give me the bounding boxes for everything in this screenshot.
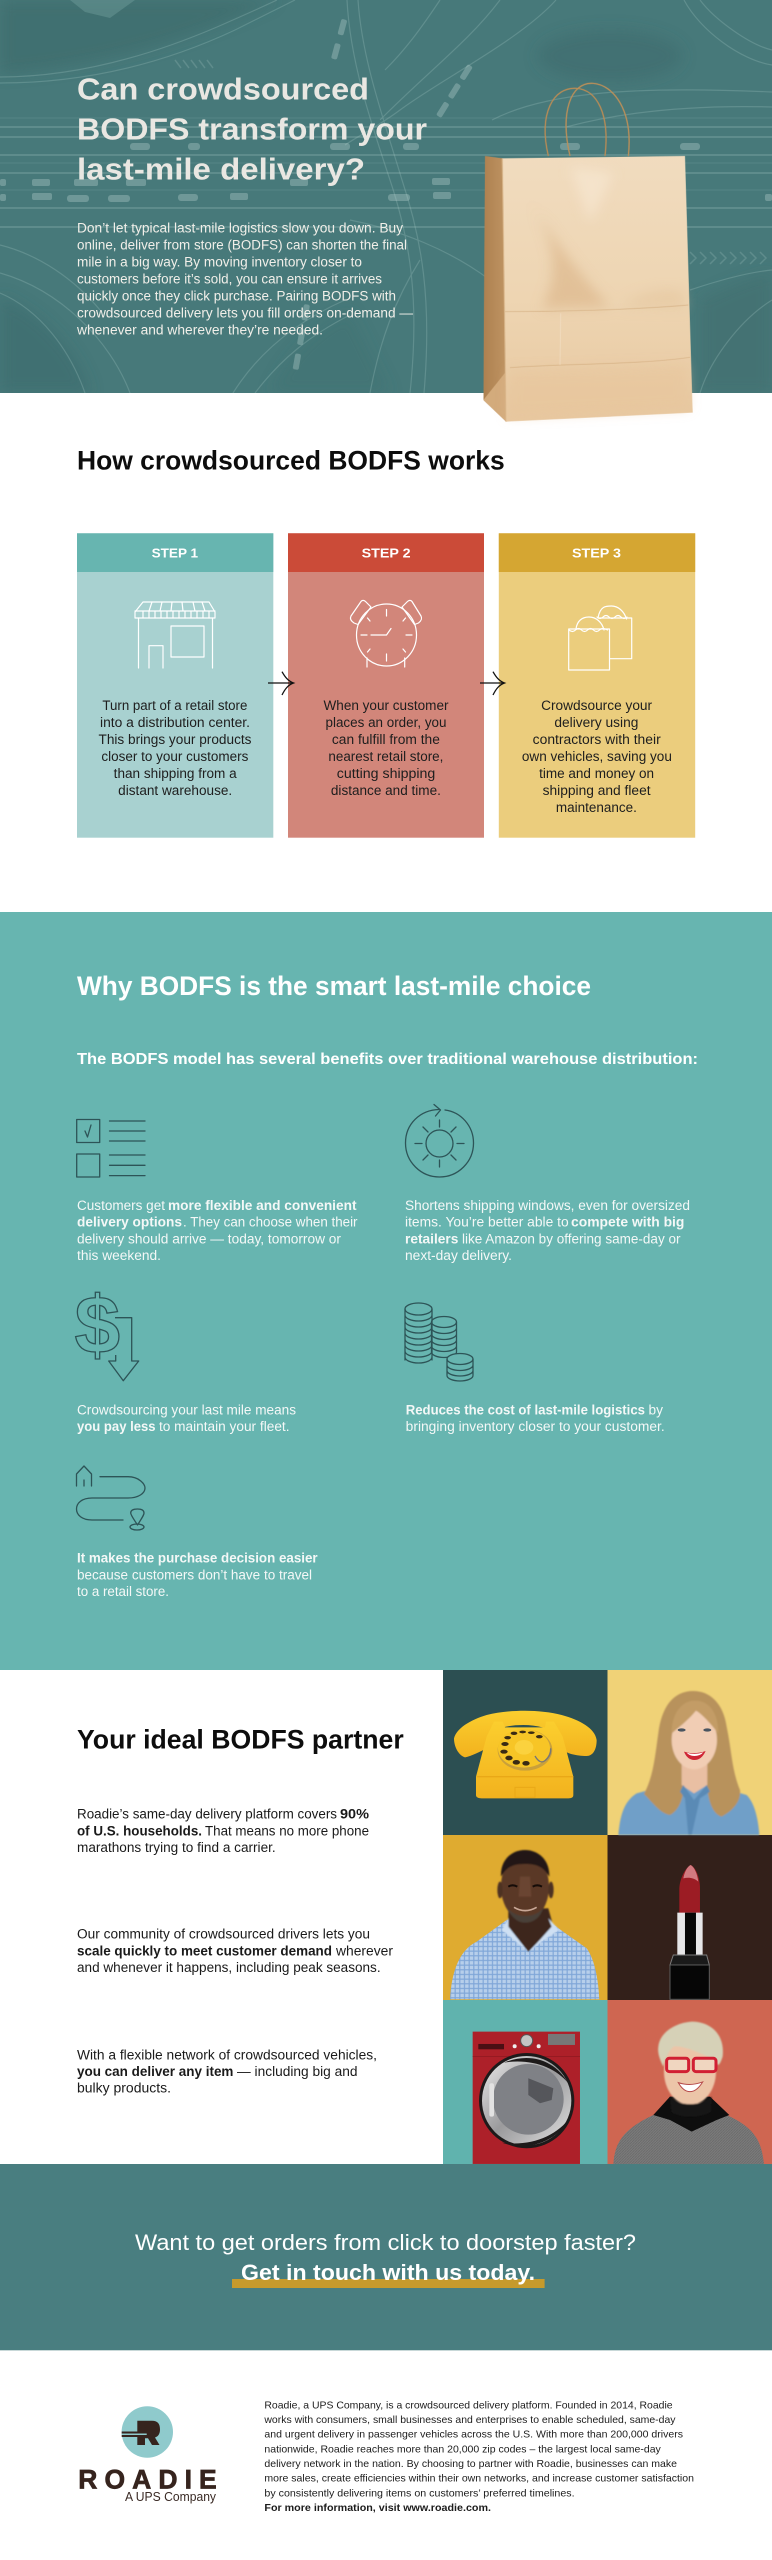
panel: hero xyxy=(0,0,772,422)
step 3 text: contractors with their xyxy=(533,732,661,747)
about Roadie text: more sales, create efficiencies within their own networks, and increase customer satisfaction xyxy=(264,2473,694,2485)
benefit: easier purchase decision: because customers don’t have to travel xyxy=(77,1567,312,1582)
benefit: you pay less: Crowdsourcing your last mile means xyxy=(77,1402,296,1417)
step 1 card: STEP 1 xyxy=(152,546,198,561)
hero road photo background xyxy=(0,0,772,393)
step 1 text: than shipping from a xyxy=(114,766,237,781)
cta underline highlight xyxy=(232,2279,545,2288)
paper bag photo xyxy=(483,83,693,422)
benefit: reduces cost: by xyxy=(648,1402,663,1417)
benefit: shorter shipping windows: Shortens shipping windows, even for oversized xyxy=(405,1198,690,1213)
step 2 text: places an order, you xyxy=(326,715,446,730)
partner point: any item: bulky products. xyxy=(77,2081,171,2096)
hero intro text xyxy=(76,220,413,337)
partner point: coverage: That means no more phone xyxy=(205,1823,369,1838)
hero intro text: online, deliver from store (BODFS) can shorten the final xyxy=(77,237,407,252)
panel: call to action xyxy=(0,2164,772,2350)
benefit: shorter shipping windows: like Amazon by offering same-day or xyxy=(462,1231,681,1246)
hero intro text: crowdsourced delivery lets you fill orders on-demand — xyxy=(77,305,413,320)
hero intro text: quickly once they click purchase. Pairing BODFS with xyxy=(77,288,396,303)
benefit: reduces cost xyxy=(406,1402,665,1434)
photo grid xyxy=(443,1670,772,2164)
step 2 text: can fulfill from the xyxy=(332,732,440,747)
partner point: scale: Our community of crowdsourced drivers lets you xyxy=(77,1927,370,1942)
subheading: The BODFS model has several benefits over traditional warehouse distribution: xyxy=(77,1051,698,1068)
benefit: shorter shipping windows xyxy=(405,1198,690,1263)
section heading: why BODFS: Why BODFS is the smart last-mile choice xyxy=(77,971,591,1001)
partner point: coverage: Roadie’s same-day delivery platform covers xyxy=(77,1807,337,1822)
step 3 text: maintenance. xyxy=(556,800,637,815)
step 1 card xyxy=(77,533,273,838)
benefit: you pay less: you pay less xyxy=(77,1419,156,1434)
hero intro text: Don’t let typical last-mile logistics slow you down. Buy xyxy=(77,220,403,235)
step 1 text: into a distribution center. xyxy=(100,715,250,730)
photo: smiling blonde woman xyxy=(618,1691,759,1835)
step 3 text xyxy=(522,698,672,815)
partner point: scale: wherever xyxy=(335,1943,394,1958)
logo: Roadie: ROADIE xyxy=(78,2464,217,2494)
photo: smiling man in checked shirt xyxy=(450,1850,599,1999)
step 1 text: Turn part of a retail store xyxy=(102,698,247,713)
icon: dollar with down arrow xyxy=(74,1280,139,1381)
step 3 text: Crowdsource your xyxy=(541,698,653,713)
hero intro text: mile in a big way. By moving inventory closer to xyxy=(77,254,362,269)
step 1 text xyxy=(98,698,252,798)
icon: alarm clock xyxy=(350,600,422,667)
icon: route from house to pin xyxy=(76,1466,145,1530)
partner point: any item xyxy=(77,2047,377,2096)
about Roadie text: and urgent delivery in passenger vehicles across the U.S. With more than 200,000 drivers xyxy=(264,2429,683,2441)
icon: coin stacks xyxy=(405,1303,473,1381)
step 3 text: delivery using xyxy=(554,715,638,730)
step 3 text: shipping and fleet xyxy=(543,783,651,798)
step 3 text: own vehicles, saving you xyxy=(522,749,672,764)
benefit: flexible options: delivery should arrive — today, tomorrow or xyxy=(77,1231,342,1246)
step 2 text: When your customer xyxy=(324,698,449,713)
benefit: shorter shipping windows: retailers xyxy=(405,1231,458,1246)
about Roadie text: delivery network in the nation. By choosing to partner with Roadie, businesses can make xyxy=(264,2458,677,2470)
step 1 text: This brings your products xyxy=(98,732,252,747)
step 3 text: time and money on xyxy=(539,766,654,781)
partner point: any item: With a flexible network of crowdsourced vehicles, xyxy=(77,2047,377,2062)
photo: yellow rotary telephone xyxy=(454,1711,597,1798)
partner point: scale xyxy=(77,1927,394,1975)
step 2 text xyxy=(324,698,449,798)
hero title: BODFS transform your xyxy=(77,111,427,146)
benefit: shorter shipping windows: next-day delivery. xyxy=(405,1248,512,1263)
benefit: you pay less: to maintain your fleet. xyxy=(159,1419,290,1434)
arrow: step 1 to step 2 xyxy=(268,672,294,695)
partner point: any item: you can deliver any item xyxy=(77,2064,233,2079)
benefit: reduces cost: Reduces the cost of last-mile logistics xyxy=(406,1402,645,1417)
partner point: scale: scale quickly to meet customer demand xyxy=(77,1943,332,1958)
panel: how it works xyxy=(77,445,695,838)
benefit: flexible options: Customers get xyxy=(77,1198,165,1213)
benefit: reduces cost: bringing inventory closer to your customer. xyxy=(406,1419,665,1434)
icon: checklist xyxy=(77,1120,145,1177)
logo: Roadie xyxy=(78,2406,217,2504)
benefit: shorter shipping windows: compete with big xyxy=(571,1215,684,1230)
about Roadie text: works with consumers, small businesses and enterprises to enable scheduled, same-day xyxy=(263,2414,676,2426)
step 2 card: STEP 2 xyxy=(362,546,411,561)
photo: red washing machine xyxy=(473,2032,580,2164)
icon: storefront xyxy=(135,602,215,668)
about Roadie text: by consistently delivering items on customers’ preferred timelines. xyxy=(264,2487,575,2499)
benefit: flexible options: delivery options xyxy=(77,1215,182,1230)
partner point: coverage: 90% xyxy=(340,1807,369,1822)
about Roadie text: For more information, visit www.roadie.com. xyxy=(264,2502,491,2514)
panel: ideal partner xyxy=(0,1670,772,2164)
arrow: step 2 to step 3 xyxy=(480,672,504,695)
partner point: any item: — including big and xyxy=(237,2064,358,2079)
icon: dollar with down arrow: $ xyxy=(74,1280,120,1371)
about Roadie text: Roadie, a UPS Company, is a crowdsourced delivery platform. Founded in 2014, Roadie xyxy=(264,2399,673,2411)
benefit: easier purchase decision: to a retail store. xyxy=(77,1584,169,1599)
step 1 text: distant warehouse. xyxy=(118,783,232,798)
hero title: Can crowdsourced xyxy=(77,71,369,106)
benefit: flexible options xyxy=(77,1198,358,1263)
step 1 text: closer to your customers xyxy=(101,749,249,764)
partner point: coverage: of U.S. households. xyxy=(77,1823,202,1838)
section heading: your ideal partner: Your ideal BODFS partner xyxy=(77,1724,404,1754)
benefit: you pay less xyxy=(77,1402,296,1434)
hero intro text: whenever and wherever they’re needed. xyxy=(76,322,323,337)
cta link text: Get in touch with us today. xyxy=(241,2260,535,2285)
benefit: shorter shipping windows: items. You’re better able to xyxy=(405,1215,569,1230)
photo: smiling woman with red glasses xyxy=(613,2022,764,2164)
icon: sun with cycle arrow xyxy=(406,1104,474,1177)
icon: shopping bags xyxy=(569,606,632,670)
partner point: scale: and whenever it happens, including peak seasons. xyxy=(77,1960,381,1975)
partner point: coverage xyxy=(77,1807,369,1855)
about Roadie text xyxy=(263,2399,694,2514)
cta question: Want to get orders from click to doorstep faster? xyxy=(135,2230,636,2255)
benefit: easier purchase decision: It makes the purchase decision easier xyxy=(77,1551,318,1566)
step 3 card xyxy=(499,533,695,838)
partner point: coverage: marathons trying to find a carrier. xyxy=(77,1840,276,1855)
about Roadie text: nationwide, Roadie reaches more than 20,000 zip codes – the largest local same-day xyxy=(264,2443,662,2455)
benefit: flexible options: . They can choose when their xyxy=(183,1215,358,1230)
benefit: flexible options: this weekend. xyxy=(77,1248,161,1263)
hero title xyxy=(77,71,427,186)
step 2 text: distance and time. xyxy=(331,783,441,798)
hero title: last-mile delivery? xyxy=(77,151,365,186)
step 2 card xyxy=(288,533,484,838)
panel: footer xyxy=(78,2399,694,2514)
benefit: easier purchase decision xyxy=(77,1551,318,1599)
panel: why BODFS xyxy=(0,912,772,1670)
benefit: flexible options: more flexible and convenient xyxy=(168,1198,357,1213)
hero intro text: customers before it’s sold, you can ensure it arrives xyxy=(77,271,382,286)
step 2 text: cutting shipping xyxy=(337,766,435,781)
section heading: how crowdsourced BODFS works: How crowdsourced BODFS works xyxy=(77,445,505,475)
step 2 text: nearest retail store, xyxy=(328,749,443,764)
step 3 card: STEP 3 xyxy=(572,546,621,561)
logo: Roadie: A UPS Company xyxy=(125,2490,217,2504)
photo: red lipstick xyxy=(670,1865,709,1999)
